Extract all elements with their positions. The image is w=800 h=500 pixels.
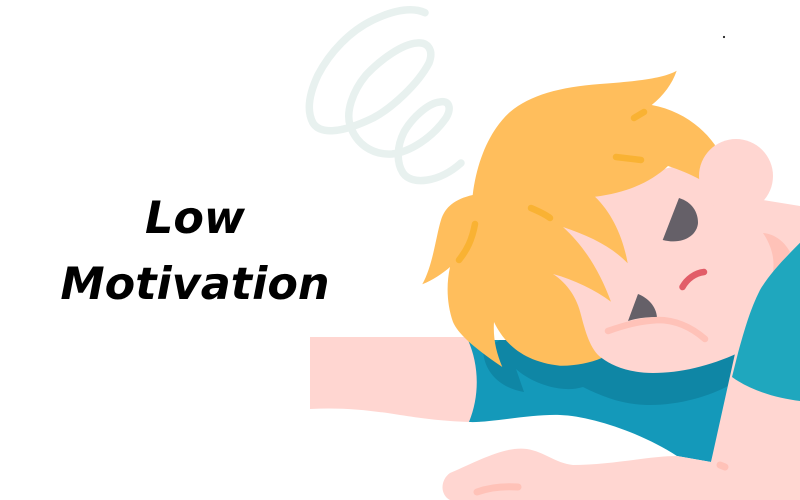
shirt xyxy=(468,340,745,462)
sleeve xyxy=(732,243,800,401)
ear xyxy=(699,139,773,213)
hair strands xyxy=(459,112,644,260)
mouth xyxy=(608,320,705,339)
shirt shadow xyxy=(483,340,745,405)
title: Low xyxy=(145,193,245,244)
eye: lower xyxy=(628,294,657,321)
small dot xyxy=(723,36,725,38)
right arm and body xyxy=(442,340,800,500)
face xyxy=(540,160,800,373)
left arm xyxy=(310,337,480,422)
hand creases xyxy=(477,465,725,492)
title xyxy=(60,193,330,310)
hair xyxy=(422,71,715,367)
icon: dizzy spiral xyxy=(309,10,461,181)
title: Motivation xyxy=(60,259,330,310)
eye: upper xyxy=(663,198,698,241)
ear shading xyxy=(763,233,790,272)
nose xyxy=(682,272,704,287)
